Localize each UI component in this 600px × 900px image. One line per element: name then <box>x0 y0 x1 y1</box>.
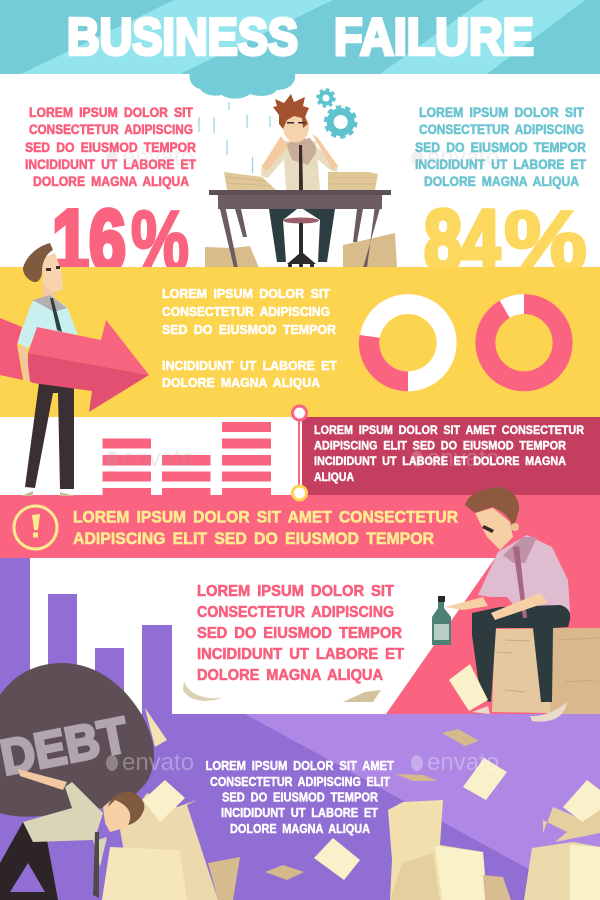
text block: yellow band <box>162 286 337 390</box>
stat: 84 percent <box>424 193 587 289</box>
bar chart: pink stacked bars <box>102 422 271 495</box>
watermarks: envato <box>122 749 194 776</box>
title: FAILURE <box>334 8 534 66</box>
illustration: man carrying arrow <box>0 243 149 496</box>
text block: left statistic: INCIDIDUNT UT LABORE ET <box>25 157 197 172</box>
text block: left statistic <box>25 105 197 189</box>
text block: maroon callout: INCIDIDUNT UT LABORE ET DOLORE MAGNA <box>314 454 566 468</box>
text block: yellow band: LOREM IPSUM DOLOR SIT <box>162 286 330 301</box>
text block: maroon callout: ADIPISCING ELIT SED DO EIUSMOD TEMPOR <box>314 438 566 452</box>
text block: left statistic: LOREM IPSUM DOLOR SIT <box>29 105 194 120</box>
text block: right statistic <box>415 105 587 189</box>
text block: right statistic: LOREM IPSUM DOLOR SIT <box>419 105 585 120</box>
watermarks: envato <box>427 749 499 776</box>
text block: left statistic: CONSECTETUR ADIPISCING <box>29 122 193 137</box>
watermarks: envato <box>122 144 194 171</box>
icon: rain cloud <box>189 72 295 173</box>
header banner <box>0 0 600 74</box>
text block: center pink <box>197 583 404 684</box>
panel: yellow band <box>0 267 600 417</box>
illustration: debt boulder <box>0 663 167 817</box>
watermarks <box>106 144 499 776</box>
text block: left statistic: DOLORE MAGNA ALIQUA <box>33 174 189 189</box>
stat: 16 percent: 16 <box>52 193 126 289</box>
text block: right statistic: DOLORE MAGNA ALIQUA <box>424 174 579 189</box>
illustration: man pushing debt boulder <box>0 769 144 900</box>
text block: center pink: SED DO EIUSMOD TEMPOR <box>197 625 402 642</box>
text block: center pink: CONSECTETUR ADIPISCING <box>197 604 394 621</box>
text block: yellow band: SED DO EIUSMOD TEMPOR <box>162 322 337 337</box>
illustration: paper stack left <box>102 780 240 900</box>
text block: yellow band: CONSECTETUR ADIPISCING <box>162 304 330 319</box>
stat: 16 percent <box>52 193 189 289</box>
text block: maroon callout: ALIQUA <box>314 470 354 484</box>
text block: purple panel: SED DO EIUSMOD TEMPOR <box>222 790 378 804</box>
text block: center pink: DOLORE MAGNA ALIQUA <box>197 667 383 684</box>
bar chart: purple declining bars <box>48 594 172 715</box>
text block: right statistic: INCIDIDUNT UT LABORE ET <box>415 157 587 172</box>
illustration: loose papers on white panel <box>183 681 381 702</box>
text block: alert <box>73 508 458 548</box>
panel: pink alert band <box>0 495 600 558</box>
illustration: man with bottle on paper stack <box>432 487 600 722</box>
text block: right statistic: SED DO EIUSMOD TEMPOR <box>415 140 586 155</box>
text block: purple panel: LOREM IPSUM DOLOR SIT AMET <box>206 759 394 773</box>
panel: purple lower background <box>0 558 600 900</box>
stat: 84 percent: % <box>504 194 587 288</box>
pink triangle panel <box>386 558 600 714</box>
title <box>67 8 534 66</box>
timeline connector with nodes <box>292 406 306 500</box>
text block: purple panel: CONSECTETUR ADIPISCING ELIT <box>210 775 390 789</box>
text block: alert: ADIPISCING ELIT SED DO EIUSMOD TEMPOR <box>73 529 434 548</box>
donut chart: left <box>359 304 447 391</box>
watermarks: envato <box>427 144 499 171</box>
text block: purple panel: INCIDIDUNT UT LABORE ET <box>221 806 378 820</box>
donut chart: right <box>485 294 563 381</box>
text block: yellow band: DOLORE MAGNA ALIQUA <box>162 375 321 390</box>
text block: purple panel <box>206 759 394 836</box>
text block: center pink: LOREM IPSUM DOLOR SIT <box>197 583 395 600</box>
text block: alert: LOREM IPSUM DOLOR SIT AMET CONSECTETUR <box>73 508 458 526</box>
stat: 16 percent: % <box>131 194 189 288</box>
icon: exclamation alert <box>14 506 57 549</box>
text block: center pink: INCIDIDUNT UT LABORE ET <box>197 646 404 663</box>
watermarks: envato <box>427 445 499 472</box>
text block: left statistic: SED DO EIUSMOD TEMPOR <box>25 140 196 155</box>
stat: 84 percent: 84 <box>424 193 500 289</box>
text block: purple panel: DOLORE MAGNA ALIQUA <box>230 822 370 836</box>
text block: yellow band: INCIDIDUNT UT LABORE ET <box>162 358 337 373</box>
illustration: paper stacks right <box>265 729 600 900</box>
icon: gears <box>318 90 356 137</box>
watermarks: envato <box>122 445 194 472</box>
illustration: stressed man at desk <box>205 94 397 268</box>
panel: maroon callout <box>302 417 600 495</box>
illustration: debt boulder: DEBT <box>0 706 132 786</box>
title: BUSINESS <box>67 8 298 66</box>
text block: maroon callout <box>314 423 584 484</box>
